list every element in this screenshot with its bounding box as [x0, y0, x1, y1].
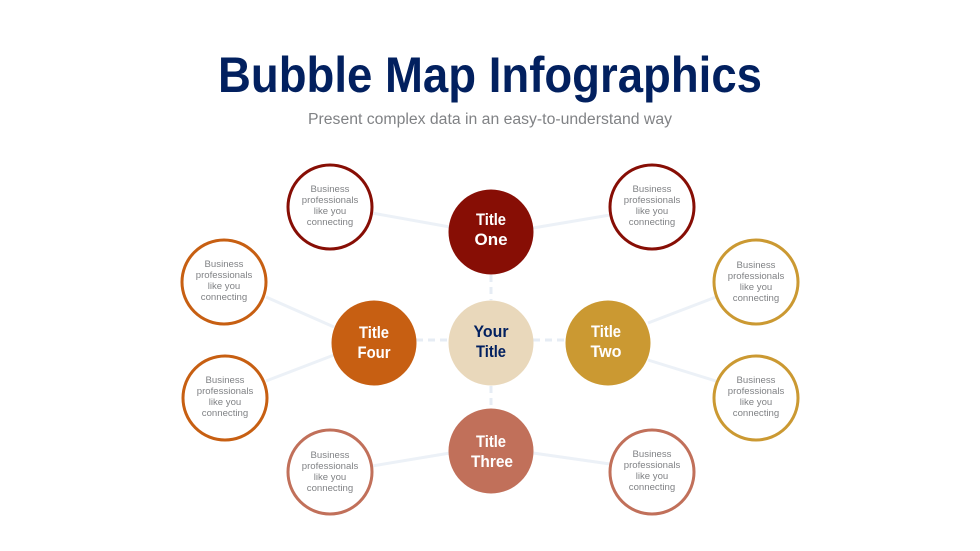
- bubble: Title One: Title: [476, 210, 506, 229]
- outer bubble: Two lower: professionals: [728, 386, 784, 397]
- outer bubble: Three right: connecting: [629, 482, 675, 493]
- outer bubble: One right: [610, 165, 694, 249]
- outer bubble: One left: connecting: [307, 217, 353, 228]
- outer bubble: Two upper: like you: [740, 282, 772, 293]
- bubble: Title Two: Title: [591, 322, 621, 341]
- outer bubble: One left: Business: [311, 184, 350, 195]
- bubble: Title One: [448, 190, 534, 274]
- bubble: Title Three: Title: [476, 432, 506, 451]
- outer bubble: Three left: professionals: [302, 461, 358, 472]
- outer bubble: Four lower: professionals: [197, 386, 253, 397]
- outer bubble: One right: like you: [636, 206, 668, 217]
- outer bubble: Three right: Business: [633, 449, 672, 460]
- outer bubble: One right: professionals: [624, 195, 680, 206]
- outer bubble: One right: Business: [633, 184, 672, 195]
- bubble: Title Four: [332, 300, 416, 386]
- outer bubble: Three left: connecting: [307, 483, 353, 494]
- outer bubble: Four upper: Business: [205, 259, 244, 270]
- outer bubble: Four upper: professionals: [196, 270, 252, 281]
- outer bubble: Four lower: connecting: [202, 408, 248, 419]
- outer bubble: One left: professionals: [302, 195, 358, 206]
- outer bubble: Two lower: like you: [740, 397, 772, 408]
- outer bubble: Four lower: [183, 356, 267, 440]
- outer bubble: Two lower: [714, 356, 798, 440]
- bubble: Title Four: Four: [358, 343, 391, 362]
- outer bubble: Two lower: connecting: [733, 408, 779, 419]
- center bubble: Your Title: Your: [474, 322, 509, 341]
- outer bubble: Two upper: [714, 240, 798, 324]
- center bubble: Your Title: [448, 300, 534, 386]
- outer bubble: Two upper: Business: [737, 260, 776, 271]
- outer bubble: Four lower: Business: [206, 375, 245, 386]
- bubble: Title Four: Title: [359, 323, 389, 342]
- outer bubble: Three right: [610, 430, 694, 514]
- outer bubble: Two upper: connecting: [733, 293, 779, 304]
- bubble: Title Two: [566, 300, 650, 386]
- bubble: Title One: One: [474, 230, 508, 249]
- center bubble: Your Title: Title: [476, 342, 506, 361]
- outer bubble: Four upper: connecting: [201, 292, 247, 303]
- title: Bubble Map Infographics: [218, 47, 762, 103]
- bubble: Title Two: Two: [590, 342, 622, 361]
- outer bubble: Three right: professionals: [624, 460, 680, 471]
- outer bubble: One left: [288, 165, 372, 249]
- outer bubble: Three left: like you: [314, 472, 346, 483]
- bubble: Title Three: Three: [471, 452, 513, 471]
- subtitle: Present complex data in an easy-to-understand way: [308, 111, 672, 128]
- outer bubble: Three left: [288, 430, 372, 514]
- outer bubble: Two upper: professionals: [728, 271, 784, 282]
- outer bubble: Three right: like you: [636, 471, 668, 482]
- outer bubble: Three left: Business: [311, 450, 350, 461]
- outer bubble: Four upper: like you: [208, 281, 240, 292]
- outer bubble: One left: like you: [314, 206, 346, 217]
- bubble: Title Three: [448, 408, 534, 494]
- outer bubble: Four lower: like you: [209, 397, 241, 408]
- outer bubble: One right: connecting: [629, 217, 675, 228]
- connectors: [266, 213, 716, 466]
- outer bubble: Four upper: [182, 240, 266, 324]
- outer bubble: Two lower: Business: [737, 375, 776, 386]
